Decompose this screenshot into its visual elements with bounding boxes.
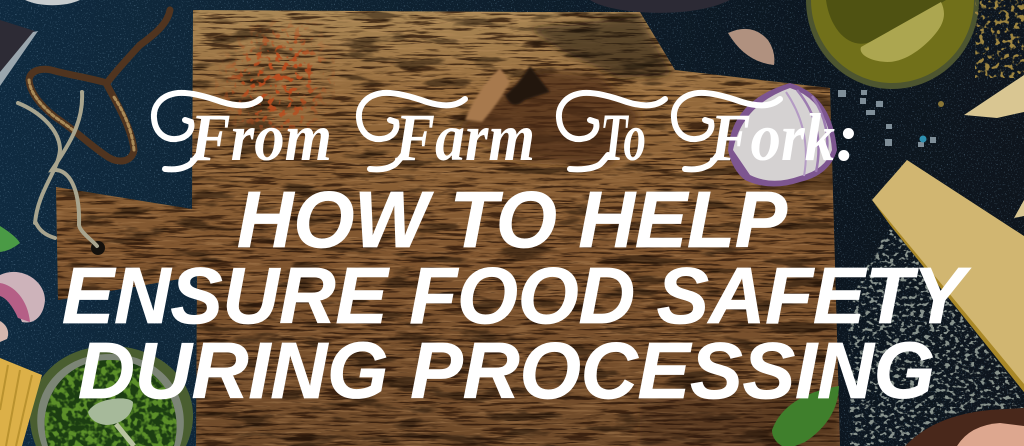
- icon: basil leaf left: [0, 226, 20, 252]
- title: From Farm To Fork: :: [836, 99, 859, 175]
- icon: salt crystals: [838, 90, 944, 147]
- heading line 2: ENSURE FOOD SAFETY: [62, 251, 971, 340]
- title: From Farm To Fork: [154, 93, 859, 175]
- title: From Farm To Fork: Farm: [394, 99, 535, 175]
- title: From Farm To Fork: From: [189, 99, 332, 175]
- icon: garlic clove top: [728, 29, 774, 65]
- icon: garlic bulb left: [0, 272, 45, 342]
- icon: oregano scatter: [975, 0, 1024, 78]
- icon: rusty corkscrew tool: [29, 10, 170, 161]
- title: From Farm To Fork: To: [600, 99, 646, 175]
- title: From Farm To Fork: Fork: [709, 99, 835, 175]
- icon: parmesan cheese wedge: [872, 160, 1024, 392]
- icon: penne pasta: [964, 75, 1024, 218]
- icon: dark bowl top: [590, 0, 730, 13]
- icon: cured meat plate: [905, 408, 1024, 446]
- grated cheese scatter: [848, 225, 1024, 446]
- heading: how to help ensure food safety during processing: [62, 175, 971, 415]
- icon: olive oil bowl: [806, 0, 979, 89]
- icon: spaghetti: [0, 358, 42, 446]
- spice scatter: [216, 21, 335, 138]
- heading line 3: DURING PROCESSING: [78, 326, 935, 415]
- cutting board: [50, 0, 850, 446]
- icon: twine: [18, 92, 97, 246]
- icon: basil leaf bottom: [772, 386, 839, 446]
- icon: red onion: [728, 83, 837, 187]
- icon: pesto jar: [30, 346, 193, 446]
- heading line 1: HOW TO HELP: [237, 175, 788, 264]
- icon: white dish top: [25, 0, 80, 5]
- icon: knife: [0, 20, 38, 86]
- handle hole: [91, 241, 105, 255]
